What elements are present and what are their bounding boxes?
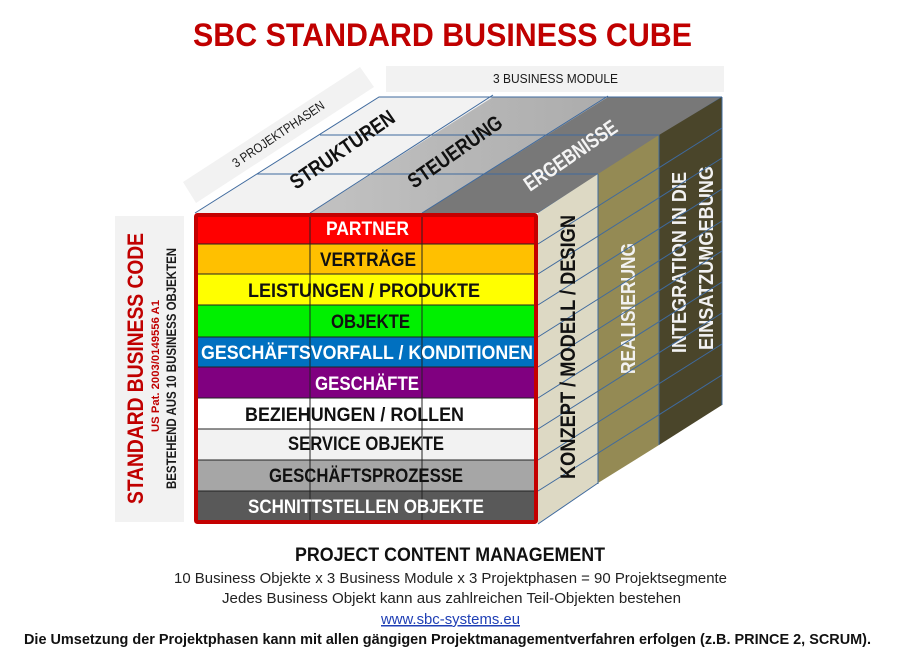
side label: Integration in die Einsatzumgebung: INTEGRATION IN DIE: [669, 172, 691, 353]
row label: Objekte: OBJEKTE: [331, 312, 410, 333]
row label: Leistungen / Produkte: LEISTUNGEN / PRODUKTE: [248, 281, 480, 302]
footer link: www.sbc-systems.eu: [380, 611, 520, 628]
top label: Ergebnisse: ERGEBNISSE: [520, 116, 622, 196]
row label: Geschäftsprozesse: GESCHÄFTSPROZESSE: [269, 466, 463, 487]
title: SBC STANDARD BUSINESS CUBE: [193, 17, 692, 53]
top label: Strukturen: STRUKTUREN: [286, 106, 399, 194]
heading: Standard Business Code: STANDARD BUSINESS CODE: [123, 233, 148, 504]
side label: Realisierung: REALISIERUNG: [618, 243, 640, 374]
left panel: Standard Business Code: [115, 216, 184, 522]
footer note: Die Umsetzung der Projektphasen kann mit allen gängigen Projektmanagementverfahren erfolgen (z.B. PRINCE 2, SCRUM).: [24, 631, 871, 648]
side label: Konzept / Modell / Design: KONZEPT / MODELL / DESIGN: [557, 215, 580, 479]
footer text: sub-objects: Jedes Business Objekt kann aus zahlreichen Teil-Objekten bestehen: [222, 590, 681, 607]
row label: Geschäftsvorfall / Konditionen: GESCHÄFTSVORFALL / KONDITIONEN: [201, 343, 533, 364]
label band: 3 Projektphasen: [183, 67, 374, 203]
row label: Geschäfte: GESCHÄFTE: [315, 374, 419, 395]
row label: Service Objekte: SERVICE OBJEKTE: [288, 434, 444, 455]
side label: Integration in die Einsatzumgebung: EINSATZUMGEBUNG: [696, 166, 718, 350]
footer heading: PROJECT CONTENT MANAGEMENT: [295, 545, 605, 566]
label band: 3 Business Module: 3 BUSINESS MODULE: [493, 71, 618, 86]
subheading: BESTEHEND AUS 10 BUSINESS OBJEKTEN: [164, 248, 179, 489]
cube right face: [538, 97, 722, 524]
cube top face: [195, 95, 722, 213]
cube front face: business object rows: [196, 215, 536, 522]
row label: Schnittstellen Objekte: SCHNITTSTELLEN OBJEKTE: [248, 497, 484, 518]
patent number: US Pat. 2003/0149556 A1: [150, 300, 162, 432]
side label: Integration in die Einsatzumgebung: [669, 166, 718, 353]
label band: 3 Business Module: [386, 66, 724, 92]
row label: Verträge: VERTRÄGE: [320, 250, 416, 271]
row label: Partner: PARTNER: [326, 219, 409, 240]
footer text: formula: 10 Business Objekte x 3 Business Module x 3 Projektphasen = 90 Projektsegmente: [174, 570, 727, 587]
top label: Steuerung: STEUERUNG: [404, 111, 507, 193]
label band: 3 Projektphasen: 3 PROJEKTPHASEN: [229, 98, 327, 170]
row label: Beziehungen / Rollen: BEZIEHUNGEN / ROLLEN: [245, 405, 464, 426]
